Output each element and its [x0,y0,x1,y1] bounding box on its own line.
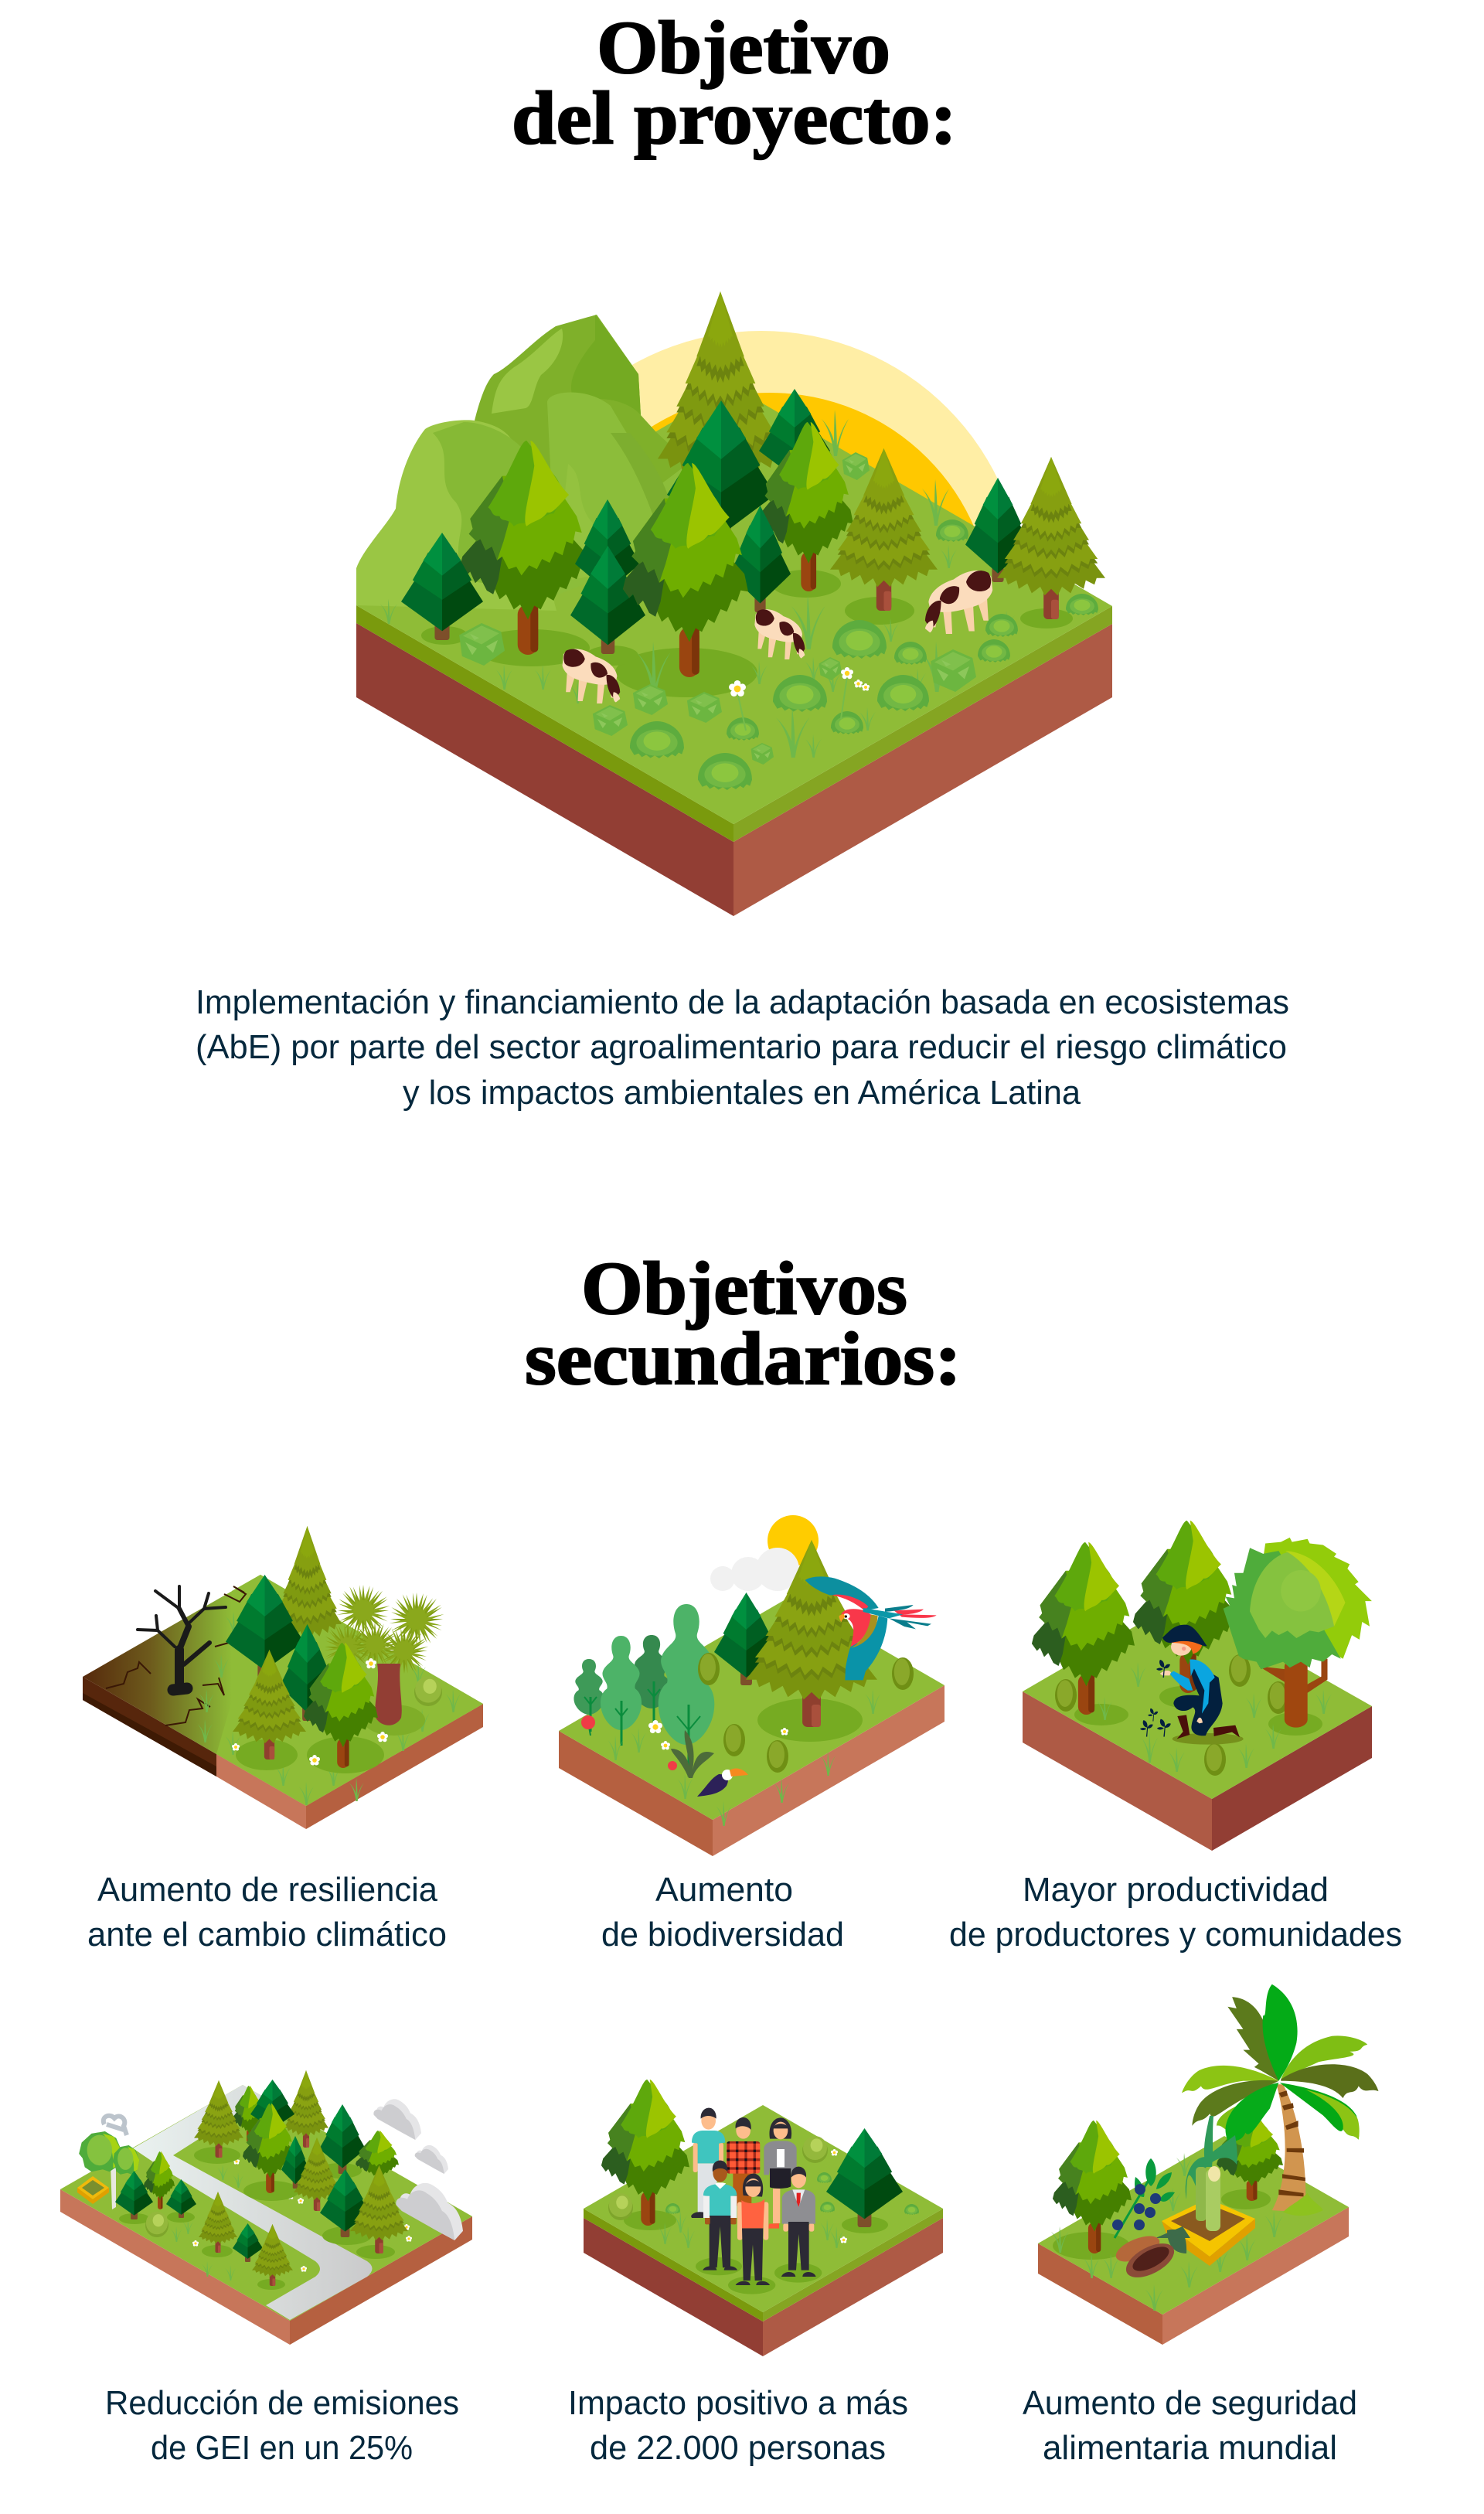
main illustration: isometric ecosystem [356,291,1112,916]
icon: toucan [697,1769,748,1797]
label: biodiversidad [601,1871,844,1954]
label: personas: de 22.000 personas [590,2429,886,2467]
front trees [401,422,1105,677]
label: personas: Impacto positivo a más [568,2384,908,2422]
trees [1053,2112,1283,2253]
icon: macaw [805,1576,937,1680]
ground block [584,2105,943,2356]
shrubs and tufts [608,1653,914,1826]
label: seguridad alimentaria: alimentaria mundial [1043,2429,1337,2467]
icon: berry branch [1112,2158,1175,2238]
leaf shrubs [459,452,976,765]
cows [563,571,992,703]
icon: sun and cloud [710,1515,819,1591]
icon: palm tree [1182,1984,1379,2216]
tree shadows [421,570,1073,697]
panel: food security [1038,1984,1379,2345]
icon: farmer [1140,1625,1244,1745]
bushes [630,519,1098,790]
shrubs and tufts [608,2136,919,2248]
label: biodiversidad: Aumento [655,1871,793,1909]
grass tufts [198,1612,461,1805]
front spruce, shrub [115,2171,168,2237]
cracks [106,1586,246,1725]
panel: productivity [1023,1521,1372,1851]
flowers [581,1715,788,1770]
label: personas [568,2384,908,2467]
label: biodiversidad: de biodiversidad [601,1916,844,1954]
person: dark skin man [703,2161,737,2270]
trees [1032,1521,1237,1715]
person: suit man [781,2167,816,2277]
paragraph: project objective: Implementación y financiamiento de la adaptación basada en ecosistemas [196,983,1289,1021]
paragraph: project objective [196,983,1289,1112]
ground block [1023,1599,1372,1851]
label: seguridad alimentaria [1023,2384,1357,2467]
mountain [356,315,692,611]
label: seguridad alimentaria: Aumento de seguridad [1023,2384,1357,2422]
back trees [658,291,1030,582]
paragraph: project objective: (AbE) por parte del sector agroalimentario para reducir el riesgo climático [196,1028,1287,1066]
people group [691,2108,822,2294]
person: orange top woman [736,2174,770,2285]
ground block [356,387,1112,916]
shadows and tufts [1051,2153,1283,2311]
shadows and tufts [1055,1654,1332,1776]
icon: clouds [373,2099,463,2240]
person: plaid shirt [727,2117,760,2206]
icon: rising sun [479,331,1036,866]
icon: dead tree [138,1586,226,1690]
label: emisiones [105,2384,459,2467]
label: resiliencia [87,1871,447,1954]
title: objetivo del proyecto: Objetivo [597,6,890,89]
ground with dry soil [83,1575,483,1829]
title: objetivos secundarios: Objetivos [581,1247,907,1330]
ground block [559,1596,945,1856]
icon: birch and smoke [79,2116,139,2209]
icon: palm fans [319,1579,449,1736]
ground block [60,2085,472,2345]
road [133,2085,373,2320]
panel: emissions reduction [60,2070,472,2345]
title: objetivo del proyecto: del proyecto: [512,77,957,159]
grass tufts [380,410,1015,758]
label: productividad: Mayor productividad [1023,1871,1329,1909]
panel: biodiversity [559,1515,945,1856]
title: objetivo del proyecto [512,6,957,159]
icon: sugar cane in planter [1162,2116,1255,2266]
tufts and daisies [171,2158,412,2281]
trees [601,2080,903,2227]
icon: round tree [1224,1538,1372,1728]
shrub and daisies [232,1658,442,1766]
title: objetivos secundarios [525,1247,962,1400]
title: objetivos secundarios: secundarios: [525,1317,962,1400]
panel: resilience [83,1526,483,1829]
icon: planter box [77,2176,109,2204]
forest [119,2070,408,2290]
paragraph: project objective: y los impactos ambientales en América Latina [403,1074,1081,1112]
icon: plant [671,1730,714,1778]
tree spruce [714,1593,778,1685]
plant silhouettes [574,1604,714,1776]
label: emisiones: Reducción de emisiones [105,2384,459,2422]
shadow and fir [746,1540,877,1742]
label: resiliencia: ante el cambio climático [87,1916,447,1954]
ground block [1038,2136,1349,2345]
label: productividad [949,1871,1402,1954]
trees [226,1526,384,1773]
label: resiliencia: Aumento de resiliencia [97,1871,438,1909]
icon: cacao pods [1112,2226,1190,2284]
person: teal shirt man [691,2108,725,2218]
person: grey blazer woman [764,2117,797,2229]
daisies [729,667,870,731]
panel: people impact [584,2080,943,2356]
label: productividad: de productores y comunidades [949,1916,1402,1954]
label: emisiones: de GEI en un 25% [151,2429,413,2467]
